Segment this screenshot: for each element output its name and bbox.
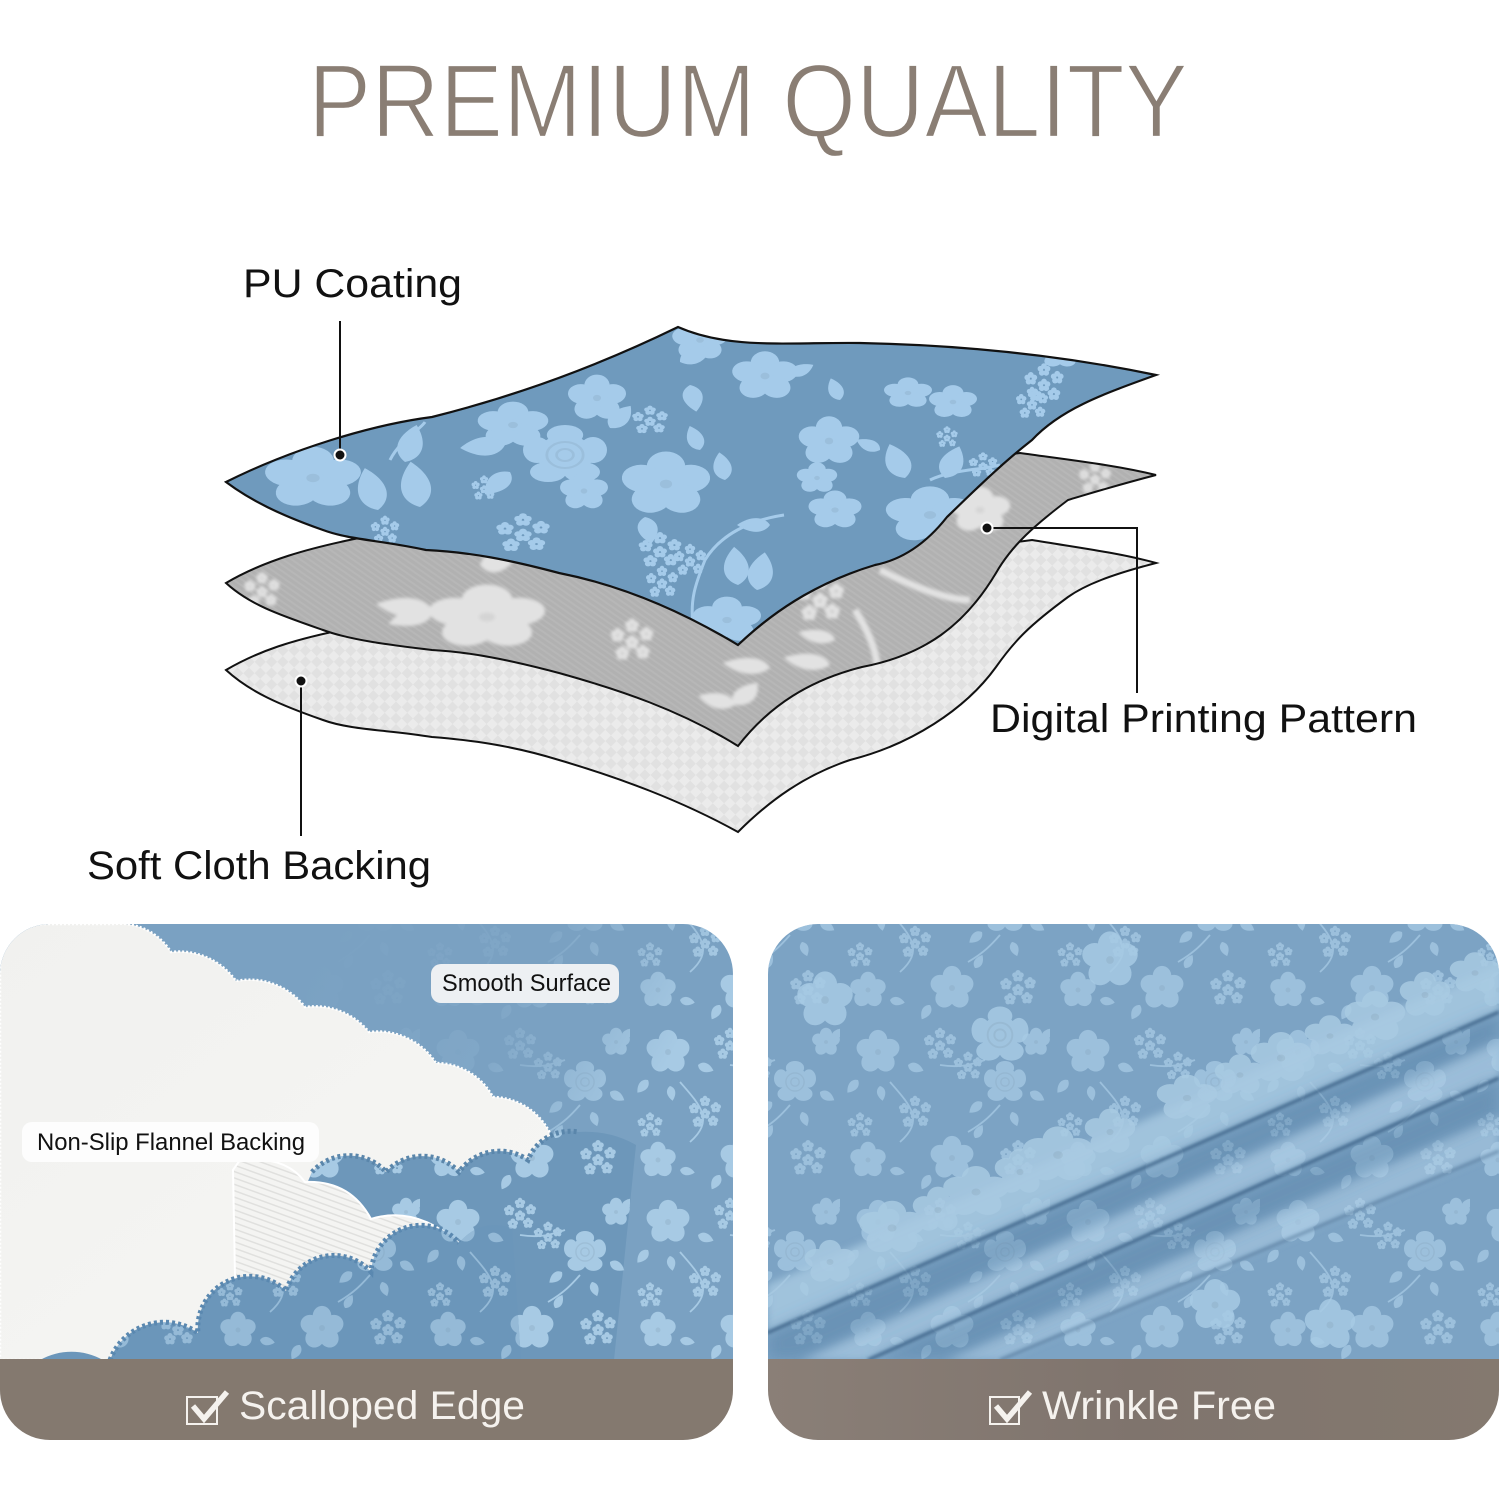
label: PU Coating (243, 262, 462, 460)
label: Soft Cloth Backing (87, 676, 431, 888)
lower folded blue fabric (40, 1225, 521, 1360)
title: PREMIUM QUALITY (308, 43, 1188, 160)
layer: digital printing pattern (226, 453, 1156, 746)
panel: wrinkle free (767, 924, 1500, 1440)
label: PU Coating: PU Coating (243, 262, 462, 306)
tag: Smooth Surface: Smooth Surface (442, 970, 611, 997)
caption: Scalloped Edge: Scalloped Edge (239, 1384, 525, 1428)
label: Digital Printing Pattern: Digital Printing Pattern (990, 697, 1417, 741)
caption band (0, 1359, 733, 1440)
white flannel backing (0, 924, 550, 1360)
panel: scalloped edge (0, 924, 733, 1440)
layer: soft cloth backing (226, 540, 1156, 832)
caption: Wrinkle Free: Wrinkle Free (1042, 1384, 1276, 1428)
tag: Smooth Surface (431, 964, 619, 1003)
tag: Non-Slip Flannel Backing: Non-Slip Flannel Backing (37, 1129, 305, 1156)
tag: Non-Slip Flannel Backing (22, 1122, 319, 1162)
layered fabric diagram (226, 319, 1156, 832)
fold creases (767, 1012, 1499, 1360)
label: Soft Cloth Backing: Soft Cloth Backing (87, 844, 431, 888)
layer: PU coating (226, 319, 1156, 645)
jagged flowers along the top fold (802, 952, 1500, 1285)
fold highlights (767, 965, 1499, 1360)
label: Digital Printing Pattern (982, 522, 1417, 741)
caption band (768, 1359, 1499, 1440)
upper folded blue fabric (308, 1128, 636, 1359)
white flap (232, 1162, 460, 1291)
